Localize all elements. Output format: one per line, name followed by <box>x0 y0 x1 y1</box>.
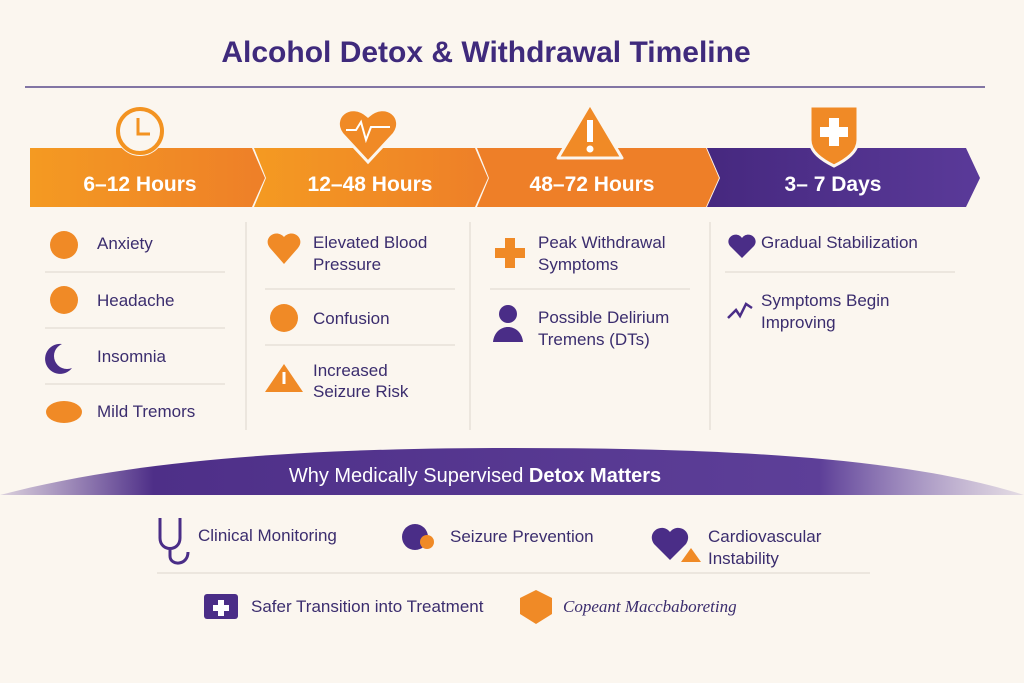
benefits: Copeant Maccbaboreting <box>563 597 737 616</box>
column 3 symptoms: Peak Withdrawal <box>538 233 666 252</box>
column 2 symptoms <box>265 233 427 401</box>
column 1 symptoms: Mild Tremors <box>97 402 195 421</box>
arrow: 48-72 hours <box>477 148 719 207</box>
icon: warning <box>265 364 303 392</box>
icon: heart pulse <box>728 235 756 258</box>
column 1 symptoms: Headache <box>97 291 175 310</box>
icon: headache <box>50 286 78 314</box>
benefits: Clinical Monitoring <box>198 526 337 545</box>
benefits: Cardiovascular <box>708 527 822 546</box>
banner: why medically supervised <box>0 448 1024 495</box>
icon: person <box>493 305 523 342</box>
column 1 symptoms: Anxiety <box>97 234 153 253</box>
column 4: Symptoms Begin <box>761 291 890 310</box>
column dividers <box>45 222 955 430</box>
column 1 symptoms <box>45 231 195 423</box>
arrow: 12-48 hours: 12–48 Hours <box>308 173 432 196</box>
column 3 symptoms: Symptoms <box>538 255 618 274</box>
column 2 symptoms: Seizure Risk <box>313 382 409 401</box>
icon: hands <box>46 401 82 423</box>
column 1 symptoms: Insomnia <box>97 347 167 366</box>
benefits: Safer Transition into Treatment <box>251 597 484 616</box>
icon: heart <box>338 110 398 162</box>
benefits: Instability <box>708 549 779 568</box>
icon: shield <box>810 106 858 166</box>
arrow: 6-12 hours <box>30 148 265 207</box>
icon: warning <box>558 104 622 158</box>
icon: heart warning <box>652 528 701 562</box>
column 3 symptoms <box>493 233 669 349</box>
icon: trend <box>728 304 752 318</box>
column 3 symptoms: Possible Delirium <box>538 308 669 327</box>
arrow: 48-72 hours: 48–72 Hours <box>530 173 654 196</box>
column 4 <box>728 233 918 332</box>
column 2 symptoms: Elevated Blood <box>313 233 427 252</box>
arrow: 6-12 hours: 6–12 Hours <box>83 173 197 196</box>
icon: clock <box>115 106 165 156</box>
timeline arrows <box>30 148 980 207</box>
icon: plus <box>495 238 525 268</box>
banner: why medically supervised: Why Medically Supervised Detox Matters <box>289 465 661 487</box>
column 2 symptoms: Increased <box>313 361 388 380</box>
column 4: Gradual Stabilization <box>761 233 918 252</box>
icon: stethoscope <box>160 518 188 563</box>
icon: heart pressure <box>268 233 300 264</box>
icon: orange badge <box>520 590 552 624</box>
icon: medkit <box>204 594 238 619</box>
icon: brain check <box>402 524 434 550</box>
icon: confused face <box>270 304 298 332</box>
arrow: 3-7 days: 3– 7 Days <box>785 173 881 196</box>
arrow: 3-7 days <box>707 148 980 207</box>
icon: brain <box>50 231 78 259</box>
arrow: 12-48 hours <box>254 148 488 207</box>
column 3 symptoms: Tremens (DTs) <box>538 330 650 349</box>
title: Alcohol Detox & Withdrawal Timeline <box>221 36 751 69</box>
benefits: Seizure Prevention <box>450 527 594 546</box>
column 4: Improving <box>761 313 836 332</box>
icon: moon <box>45 344 72 374</box>
column 2 symptoms: Pressure <box>313 255 381 274</box>
column 2 symptoms: Confusion <box>313 309 390 328</box>
benefits <box>157 518 870 624</box>
